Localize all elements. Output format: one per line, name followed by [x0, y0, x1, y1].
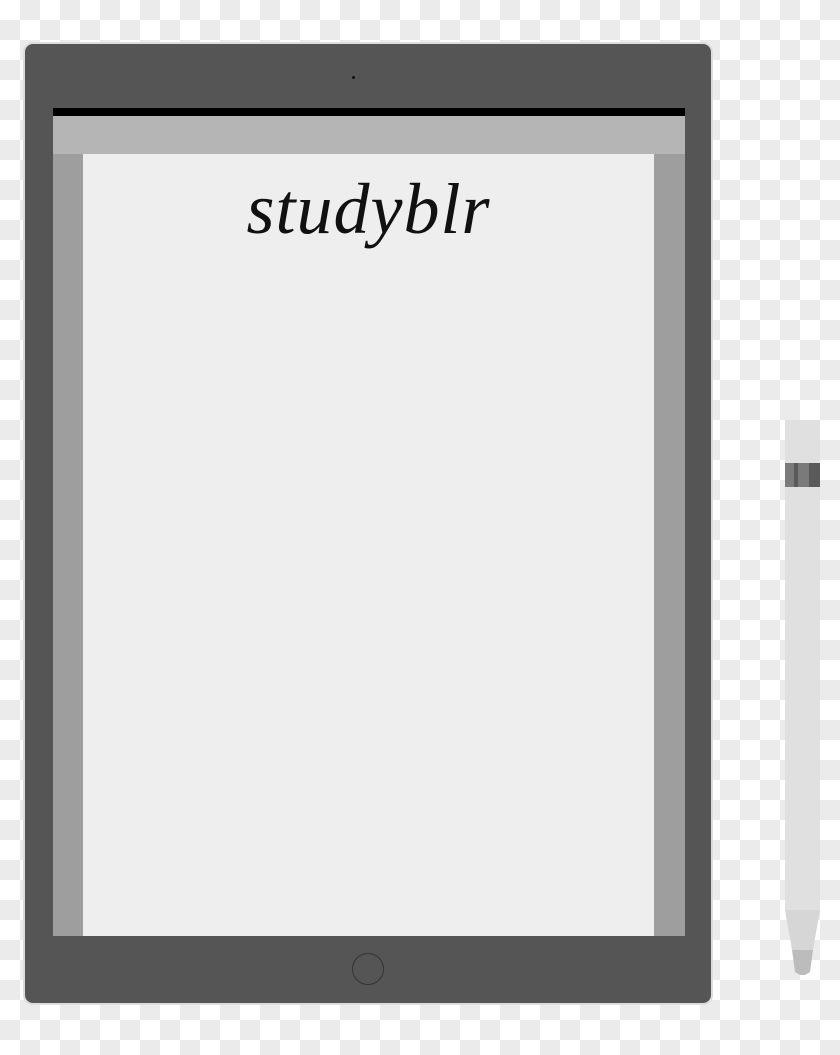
screen	[53, 108, 685, 936]
heading: studyblr	[246, 169, 490, 249]
camera	[352, 76, 355, 79]
tablet	[23, 42, 713, 1005]
home button	[352, 953, 384, 985]
page	[83, 154, 654, 936]
